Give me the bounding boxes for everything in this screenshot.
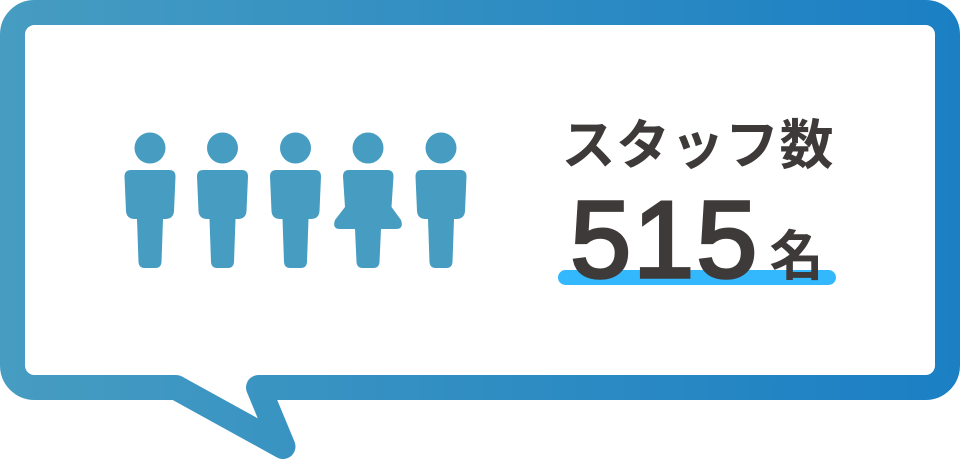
icon: row of five staff figures: [124, 132, 466, 268]
highlight underline: [558, 270, 836, 285]
icon: man 1: [124, 132, 176, 268]
icon: woman: [334, 132, 402, 268]
icon: man 3: [270, 132, 321, 268]
heading: staff count label: スタッフ数: [562, 116, 834, 176]
icon: man 5: [416, 132, 466, 268]
unit: people: 名: [770, 227, 824, 287]
icon: man 2: [197, 132, 248, 268]
number: 515: 515: [570, 179, 760, 301]
